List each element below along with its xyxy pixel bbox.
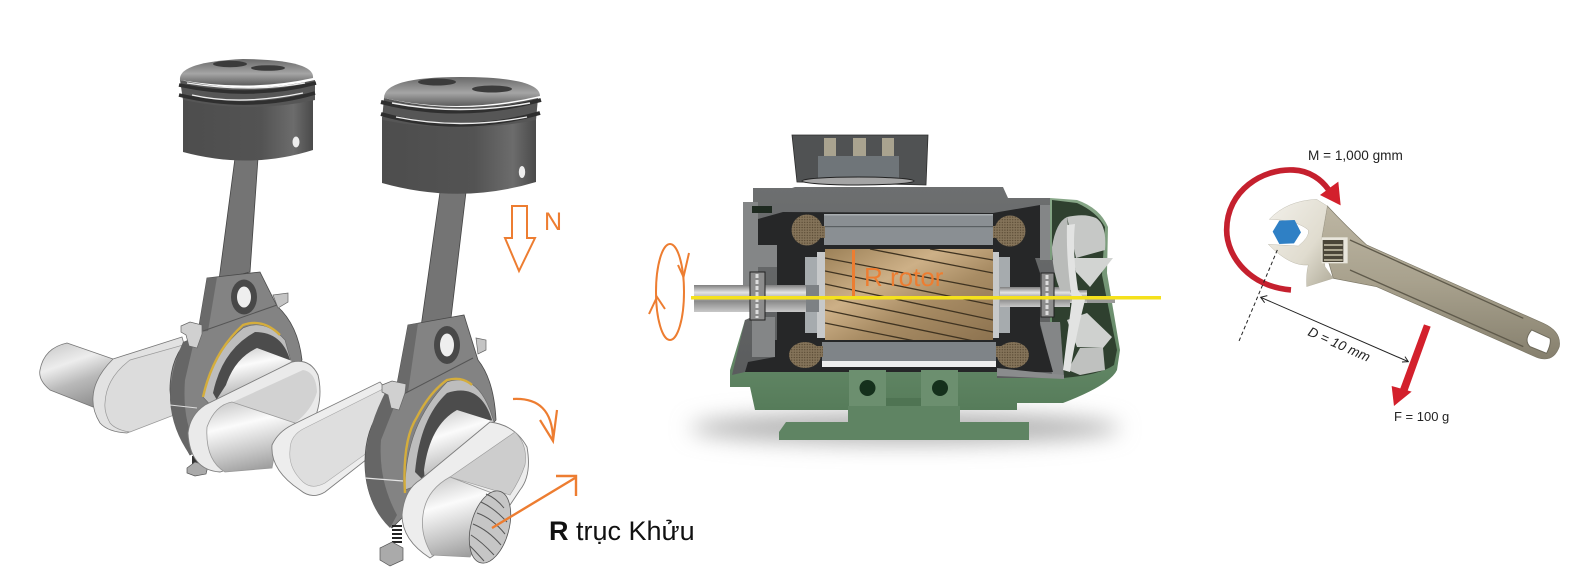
- distance arrow: [1261, 296, 1408, 362]
- left journal: [215, 348, 292, 402]
- yellow axis line: [691, 296, 1161, 300]
- fan centre band: [1063, 224, 1085, 372]
- grey housing wall: [732, 187, 1064, 378]
- stator windings: [789, 214, 1029, 368]
- rotor end rings: [805, 252, 1010, 338]
- worm screw: [1322, 237, 1348, 263]
- label R truc Khuu: R trục Khửu: [549, 516, 695, 546]
- rotor radius line: [852, 250, 855, 297]
- right rod pin hole: [434, 326, 460, 364]
- label N: N: [544, 208, 562, 236]
- middle crank cylinder: [207, 402, 295, 472]
- force arrow N: [505, 206, 535, 271]
- left connecting rod shaft: [219, 158, 258, 280]
- label force: F = 100 g: [1394, 409, 1449, 424]
- blue hex bolt: [1273, 220, 1301, 244]
- bottom grey rim: [997, 368, 1064, 379]
- left lower bolt: [187, 456, 208, 476]
- left connecting rod big end: [170, 272, 302, 455]
- right connecting rod big end: [365, 315, 496, 528]
- left wrist pin hole: [292, 136, 300, 148]
- right rear bolt: [476, 338, 486, 354]
- left upper bolt: [181, 322, 202, 348]
- bearings: [750, 272, 1054, 320]
- right lower bolt and spring: [380, 526, 403, 566]
- fan blades: [1067, 215, 1113, 375]
- panel: wrench torque diagram: [1227, 148, 1560, 424]
- front crank cylinder: [422, 477, 505, 557]
- wrench handle: [1322, 206, 1560, 359]
- stator bottom: [822, 342, 996, 367]
- left piston rings: [179, 80, 316, 107]
- middle crank web one: [188, 361, 320, 472]
- label moment: M = 1,000 gmm: [1308, 148, 1403, 163]
- motor feet: [779, 370, 1029, 440]
- right piston body: [382, 117, 536, 194]
- red force arrow: [1392, 324, 1431, 406]
- left rear bolt: [273, 293, 288, 308]
- motor green outer shell: [730, 198, 1120, 410]
- label distance: D = 10 mm: [1306, 324, 1373, 365]
- dark interior: [745, 205, 1053, 372]
- handle groove: [1350, 240, 1523, 347]
- middle crank web two: [272, 382, 395, 496]
- right piston crown: [384, 77, 540, 106]
- stator top: [824, 214, 993, 245]
- middle web face: [233, 370, 317, 423]
- dashed reference line: [1238, 250, 1277, 343]
- right journal: [424, 410, 492, 482]
- left bearing: [203, 323, 292, 410]
- right bearing: [404, 379, 495, 493]
- front crank web: [402, 422, 528, 558]
- rotor core: [825, 249, 993, 348]
- housing light wall faces: [743, 202, 1064, 378]
- right piston rings: [381, 98, 541, 128]
- far left shaft cylinder: [40, 343, 113, 407]
- fan back disc: [1052, 217, 1073, 290]
- radius arrow: [492, 476, 576, 528]
- shaft: [694, 285, 1115, 312]
- dark pocket: [752, 206, 772, 213]
- wrench head: [1268, 199, 1333, 287]
- left piston body: [183, 100, 313, 161]
- motor ground shadow: [690, 412, 1120, 444]
- far left crank web: [93, 337, 200, 433]
- mounting holes: [860, 380, 948, 396]
- left rod pin hole: [231, 280, 257, 314]
- left piston crown: [180, 59, 313, 86]
- rotation arrow around shaft: [649, 244, 689, 340]
- terminal block: [802, 138, 914, 185]
- label R rotor: R rotor: [864, 262, 944, 292]
- panel: electric motor cutaway: [649, 135, 1161, 444]
- red moment arrow: [1227, 170, 1341, 290]
- left crown holes: [213, 61, 285, 71]
- terminal box lid: [792, 135, 928, 185]
- right crown holes: [418, 78, 512, 92]
- right wrist pin hole: [519, 166, 525, 178]
- right upper bolt: [382, 381, 406, 410]
- fan cowl dark interior: [1052, 200, 1117, 378]
- rotation arrow: [513, 399, 557, 441]
- right connecting rod shaft: [421, 192, 466, 327]
- wrench handle hole: [1527, 330, 1550, 353]
- shaft cross-section: [462, 486, 518, 568]
- front web face: [450, 432, 526, 495]
- panel: piston and crankshaft illustration: [40, 59, 695, 568]
